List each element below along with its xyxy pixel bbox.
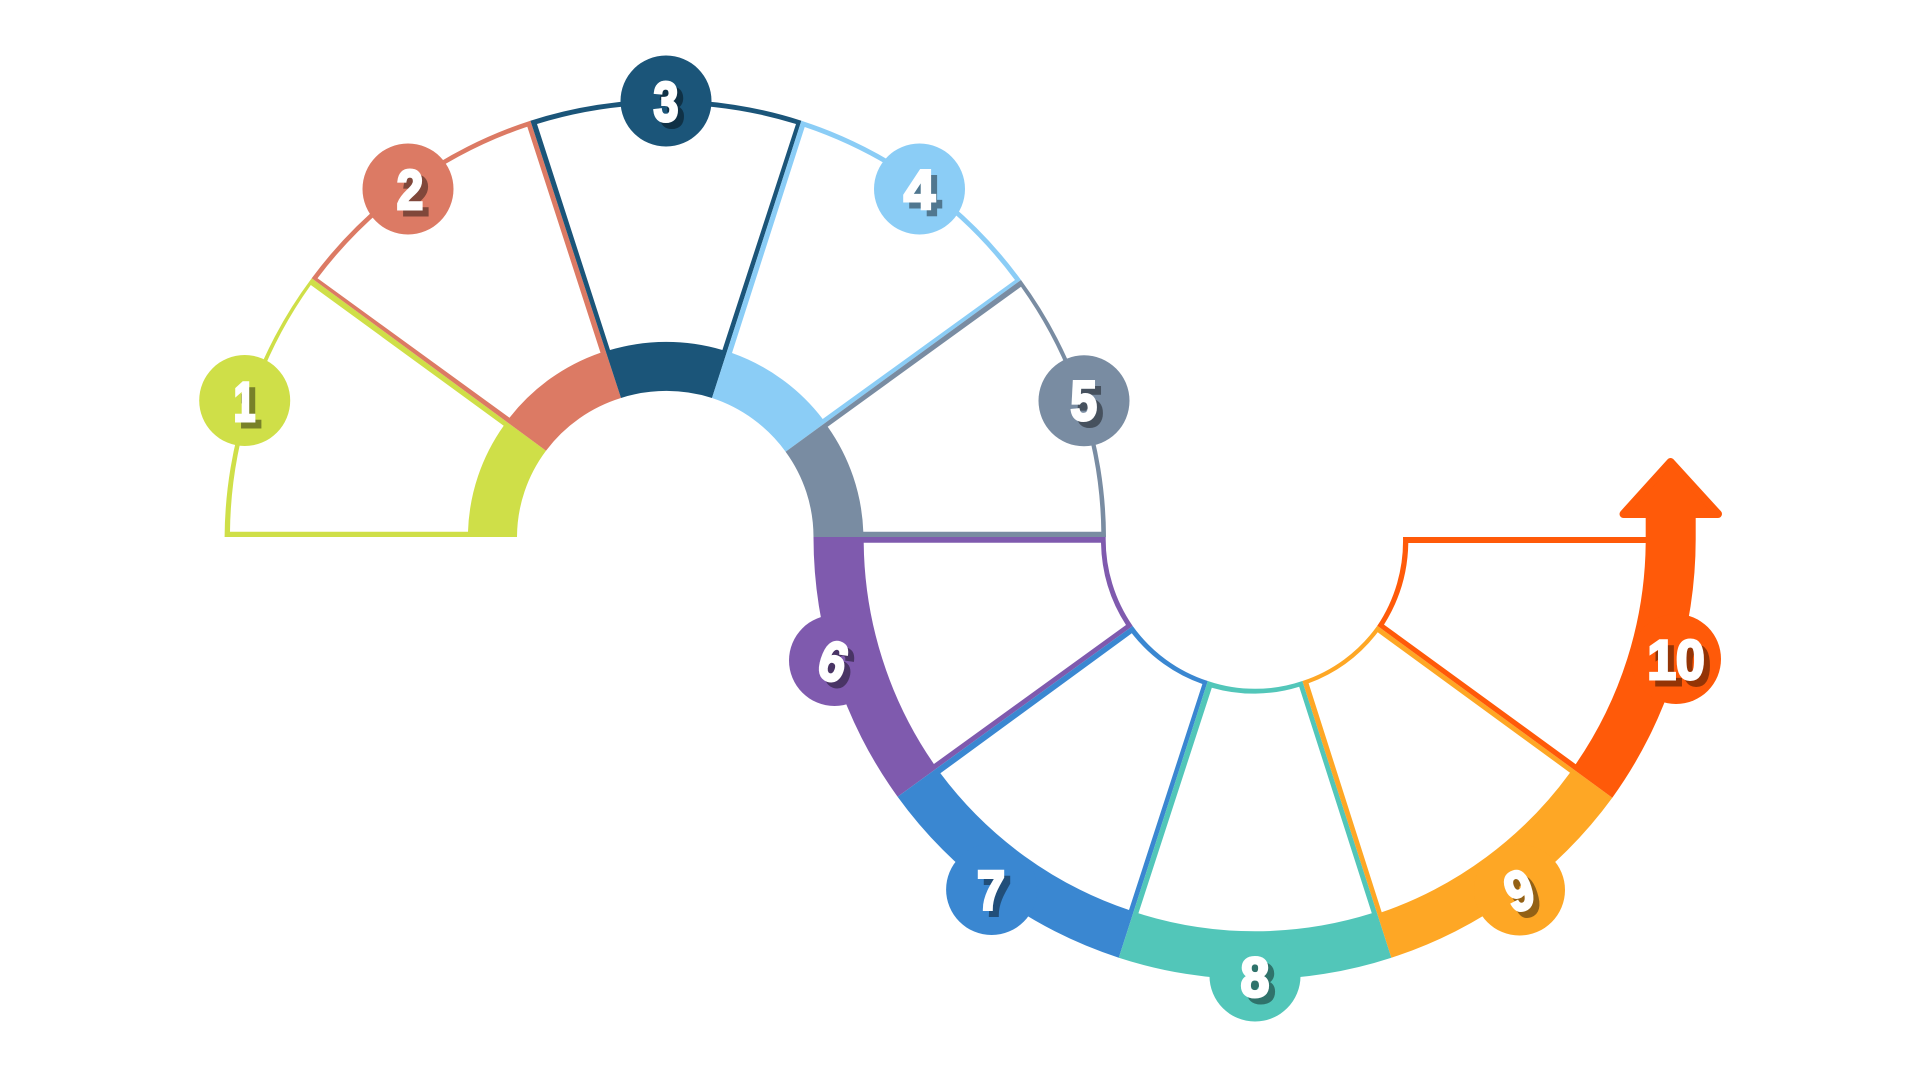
badge 8 circle — [1210, 930, 1300, 1022]
badge 4 — [874, 144, 965, 234]
segment 8 colour band — [1119, 681, 1391, 979]
segment 1 colour band — [225, 278, 546, 537]
segment 3 — [530, 100, 801, 398]
number 2: 2 — [397, 159, 423, 222]
badge 1 — [199, 355, 290, 446]
segment 2 — [312, 121, 621, 451]
number 9: 9 — [1497, 858, 1542, 925]
segment 3 interior — [537, 104, 796, 350]
segment 1 — [225, 278, 546, 537]
segment 7 colour band — [898, 626, 1208, 958]
number 8: 8 — [1241, 947, 1269, 1009]
number 5: 5 — [1070, 370, 1097, 433]
badge 9 circle — [1474, 844, 1565, 936]
number 3: 3 — [654, 70, 678, 133]
number 7: 7 — [977, 860, 1005, 922]
badge 7 circle — [946, 844, 1037, 935]
number 10: 10 — [1647, 629, 1705, 691]
number 4: 4 — [904, 158, 935, 221]
segment 9 colour band — [1302, 626, 1612, 958]
segment 9 — [1302, 626, 1612, 958]
badge 3 — [620, 56, 712, 146]
badge 2 — [362, 144, 454, 234]
segment 10 interior — [1384, 543, 1646, 764]
segment 6 colour band — [813, 537, 1133, 797]
segment 7 interior — [940, 633, 1202, 910]
segment 8 interior — [1138, 687, 1372, 931]
segment 9 interior — [1309, 632, 1570, 912]
segment 2 colour band — [312, 121, 621, 451]
segment 3 colour band — [530, 100, 801, 398]
badge 5 — [1038, 355, 1130, 446]
segment 10 colour band — [1377, 510, 1696, 798]
segment 6 — [789, 537, 1133, 797]
number 6: 6 — [811, 628, 855, 696]
segment 1 interior — [230, 285, 504, 532]
segment 4 colour band — [712, 121, 1021, 452]
segment 2 interior — [318, 127, 600, 418]
icon: arrow head — [1624, 462, 1718, 514]
badge 10 circle — [1631, 614, 1721, 704]
segment 6 interior — [864, 543, 1126, 764]
segment 10 with arrow — [1377, 462, 1721, 798]
segment 5 colour band — [786, 280, 1106, 537]
badge 6 circle — [789, 615, 880, 706]
segment 7 — [898, 626, 1208, 958]
segment 4 interior — [732, 127, 1015, 419]
segment 4 — [712, 121, 1021, 452]
segment 5 interior — [828, 287, 1101, 532]
number 1: 1 — [234, 371, 255, 434]
segment 8 — [1119, 681, 1391, 1022]
segment 5 — [786, 280, 1106, 537]
